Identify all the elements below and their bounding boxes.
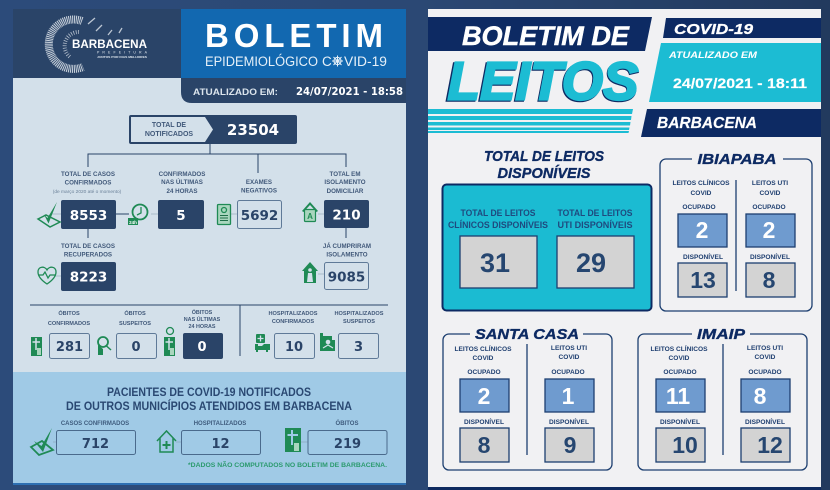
stat: óbitos 24 horas: 0 [197,340,207,355]
icon: check [31,428,53,455]
column: clínicos: DISPONÍVEL [660,417,700,426]
stat: hospitalizados: HOSPITALIZADOS [194,421,246,427]
card: uti [557,208,634,288]
column: clínicos: 2 [696,217,708,243]
header: title block [181,9,406,78]
stat: óbitos: 219 [334,437,361,452]
stat: hospitalizados confirmados: CONFIRMADOS [272,319,314,325]
column: uti: OCUPADO [551,369,585,376]
card: clínicos: TOTAL DE LEITOS [460,208,536,219]
column: uti: 8 [763,267,776,293]
stat: total de casos confirmados: CONFIRMADOS [65,180,111,186]
column: clínicos: 8 [478,432,491,458]
stat: já cumpriram isolamento: ISOLAMENTO [326,252,368,258]
panel: total de leitos disponíveis [442,148,652,310]
stat: isolamento domiciliar: ISOLAMENTO [324,179,366,186]
card: uti: TOTAL DE LEITOS [558,208,632,219]
column: uti: DISPONÍVEL [750,252,790,261]
icon: house: A [307,212,313,221]
stat: confirmados 24 horas [158,171,205,229]
banner: barbacena [641,109,821,137]
panel: ibiapaba: IBIAPABA [698,151,776,168]
column: uti: LEITOS UTI [551,345,587,352]
stat: hospitalizados confirmados: HOSPITALIZADOS [268,311,318,317]
column: clínicos: 11 [666,383,690,409]
banner: atualizado [649,43,821,102]
subtitle: EPIDEMIOLÓGICO [205,54,318,69]
column: uti: LEITOS UTI [747,345,783,352]
icon: clock 24h [128,204,148,225]
card: uti: 29 [576,248,606,278]
stat: óbitos 24 horas: 24 HORAS [189,324,216,330]
stat: casos recuperados: TOTAL DE CASOS [61,243,115,250]
stat: hospitalizados suspeitos: SUSPEITOS [343,319,375,325]
stat: isolamento domiciliar: DOMICILIAR [327,188,364,195]
column: uti: 2 [763,217,775,243]
stat: confirmados 24 horas: 5 [176,208,186,224]
stat: isolamento domiciliar [324,171,369,228]
column: clínicos: COVID [473,355,494,362]
logo wordmark: JUNTOS POR DIAS MELHORES [97,55,147,59]
update bar [181,78,406,103]
stat: óbitos suspeitos: 0 [131,340,141,355]
panel: boletim epidemiológico [13,9,406,485]
icon: clock 24h: 24h [129,220,137,225]
stat: óbitos confirmados: 281 [56,340,83,355]
stat: exames negativos [238,179,282,228]
column: clínicos: LEITOS CLÍNICOS [672,178,730,187]
panel: imaip: IMAIP [697,326,746,343]
column: clínicos: LEITOS CLÍNICOS [650,344,708,353]
card: uti: UTI DISPONÍVEIS [558,220,632,231]
stat: óbitos: ÓBITOS [336,419,358,427]
card: clínicos [448,208,548,288]
stat: casos recuperados [61,243,116,291]
panel: imaip [638,325,807,470]
heading: DE OUTROS MUNICÍPIOS ATENDIDOS EM BARBACENA [66,400,352,413]
header: logo block [13,9,181,78]
panel: outros municípios [13,372,406,485]
column: clínicos [454,344,512,462]
column: uti: COVID [559,354,580,361]
stat: já cumpriram isolamento [323,243,371,290]
total de notificados: NOTIFICADOS [145,131,193,138]
stat: óbitos suspeitos: SUSPEITOS [119,321,151,327]
stat: óbitos confirmados: CONFIRMADOS [48,321,90,327]
divider [30,305,388,356]
stat: já cumpriram isolamento: 9085 [328,270,365,286]
stat: casos recuperados: RECUPERADOS [64,252,112,258]
stat: confirmados 24 horas: CONFIRMADOS [159,171,205,178]
stat: óbitos suspeitos [116,309,156,358]
total de notificados [129,115,297,144]
stat: total de casos confirmados: TOTAL DE CASOS [61,171,115,178]
stat: hospitalizados confirmados [268,311,318,358]
stat: total de casos confirmados: (de março 2020 até o momento) [53,189,122,195]
footnote: *DADOS NÃO COMPUTADOS NO BOLETIM DE BARBACENA. [188,460,387,469]
banner: atualizado: 24/07/2021 - 18:11 [673,75,807,91]
title: leitos: LEITOS [448,52,638,112]
stat: hospitalizados suspeitos: 3 [354,340,363,355]
subtitle [205,54,387,69]
heading: TOTAL DE LEITOS [484,148,604,165]
icon: tomb with clock [164,328,175,356]
icon: house [302,202,318,222]
column: uti: COVID [755,354,776,361]
column: clínicos [650,344,708,462]
column: uti: DISPONÍVEL [549,417,589,426]
column: clínicos: OCUPADO [663,369,697,376]
banner: boletim de: BOLETIM DE [462,21,630,51]
stat: hospitalizados suspeitos [334,311,384,358]
column: clínicos [672,178,730,297]
icon: house plus [157,431,176,452]
column: clínicos: 10 [672,432,698,458]
heading: PACIENTES DE COVID-19 NOTIFICADOS [107,387,311,399]
icon: house with person [302,262,318,283]
column: clínicos: LEITOS CLÍNICOS [454,344,512,353]
stat: confirmados 24 horas: NAS ÚLTIMAS [161,179,203,186]
column: clínicos: OCUPADO [682,204,716,211]
stat: óbitos 24 horas: NAS ÚLTIMAS [184,316,221,323]
panel: boletim de leitos [428,9,821,490]
stat: óbitos suspeitos: ÓBITOS [124,309,146,317]
stat: total de casos confirmados [53,171,122,229]
update bar: 24/07/2021 - 18:58 [296,86,403,98]
card: clínicos: CLÍNICOS DISPONÍVEIS [448,220,548,231]
stat: hospitalizados [182,421,260,454]
stat: hospitalizados confirmados: 10 [285,340,303,355]
logo wordmark: PREFEITURA [97,50,148,54]
icon: heart [38,267,56,284]
column: uti: 8 [754,383,767,409]
stat: óbitos confirmados [48,309,90,358]
column: uti: OCUPADO [748,369,782,376]
banner: atualizado: ATUALIZADO EM [668,50,758,60]
icon: tomb [285,428,301,452]
stat: exames negativos: NEGATIVOS [241,188,277,194]
stat: exames negativos: 5692 [241,208,278,224]
stat: hospitalizados: 12 [211,437,230,452]
stat: casos confirmados: CASOS CONFIRMADOS [61,421,129,427]
logo wordmark [72,37,148,59]
stat: óbitos [308,419,387,454]
stat: isolamento domiciliar: 210 [332,208,361,224]
stripes [428,109,633,133]
heading [66,387,352,413]
column: clínicos: DISPONÍVEL [464,417,504,426]
column: clínicos: 2 [478,383,490,409]
stat: isolamento domiciliar: TOTAL EM [330,171,360,178]
banner: covid-19 [663,18,821,38]
subtitle: C [322,54,332,69]
stat: óbitos 24 horas [183,308,223,359]
column: uti: OCUPADO [752,204,786,211]
update bar: ATUALIZADO EM: [193,87,278,98]
panel: santa casa [443,325,612,470]
stat: exames negativos: EXAMES [246,179,272,186]
column: clínicos: DISPONÍVEL [683,252,723,261]
icon: magnifier person [98,337,111,355]
heading [484,148,604,182]
column: uti: LEITOS UTI [752,180,788,187]
title: leitos: LEITOS [446,52,638,112]
card: clínicos: 31 [480,248,510,278]
stat: casos confirmados [56,421,136,454]
column: clínicos: COVID [691,190,712,197]
stat: óbitos 24 horas: ÓBITOS [192,308,213,316]
icon: hospital bed [255,334,270,352]
column: uti: 12 [757,432,783,458]
stat: casos confirmados: 712 [82,437,109,452]
connector tree [88,144,346,238]
logo wordmark: BARBACENA [72,37,147,51]
column: uti [741,345,790,462]
stat: hospitalizados suspeitos: HOSPITALIZADOS [334,311,384,317]
icon: virus [332,56,343,66]
column: uti [545,345,594,462]
icon: check [38,202,60,227]
icon: dandelion logo [49,18,122,69]
column: uti: COVID [760,190,781,197]
stat: confirmados 24 horas: 24 HORAS [167,188,197,195]
panel: ibiapaba [660,150,812,311]
icon: patient [320,333,335,351]
column: clínicos: 13 [690,267,716,293]
subtitle: VID-19 [344,54,387,69]
heading: DISPONÍVEIS [498,165,590,182]
column: uti: DISPONÍVEL [745,417,785,426]
total de notificados: TOTAL DE [152,122,186,129]
column: uti: 9 [564,432,576,458]
column: clínicos: COVID [669,355,690,362]
total de notificados: 23504 [227,121,279,139]
title: BOLETIM [205,17,388,54]
icon: document [218,204,230,224]
stat: total de casos confirmados: 8553 [70,208,107,224]
column: uti: 1 [562,383,575,409]
icon: tomb [31,337,42,356]
column: uti [746,180,795,297]
stat: já cumpriram isolamento: JÁ CUMPRIRAM [323,243,371,250]
banner: covid-19: COVID-19 [674,21,754,38]
banner: boletim de [428,17,652,51]
banner: barbacena: BARBACENA [657,115,757,132]
column: clínicos: OCUPADO [467,369,501,376]
stat: óbitos confirmados: ÓBITOS [58,309,80,317]
panel: santa casa: SANTA CASA [475,326,579,343]
stat: casos recuperados: 8223 [70,270,107,286]
